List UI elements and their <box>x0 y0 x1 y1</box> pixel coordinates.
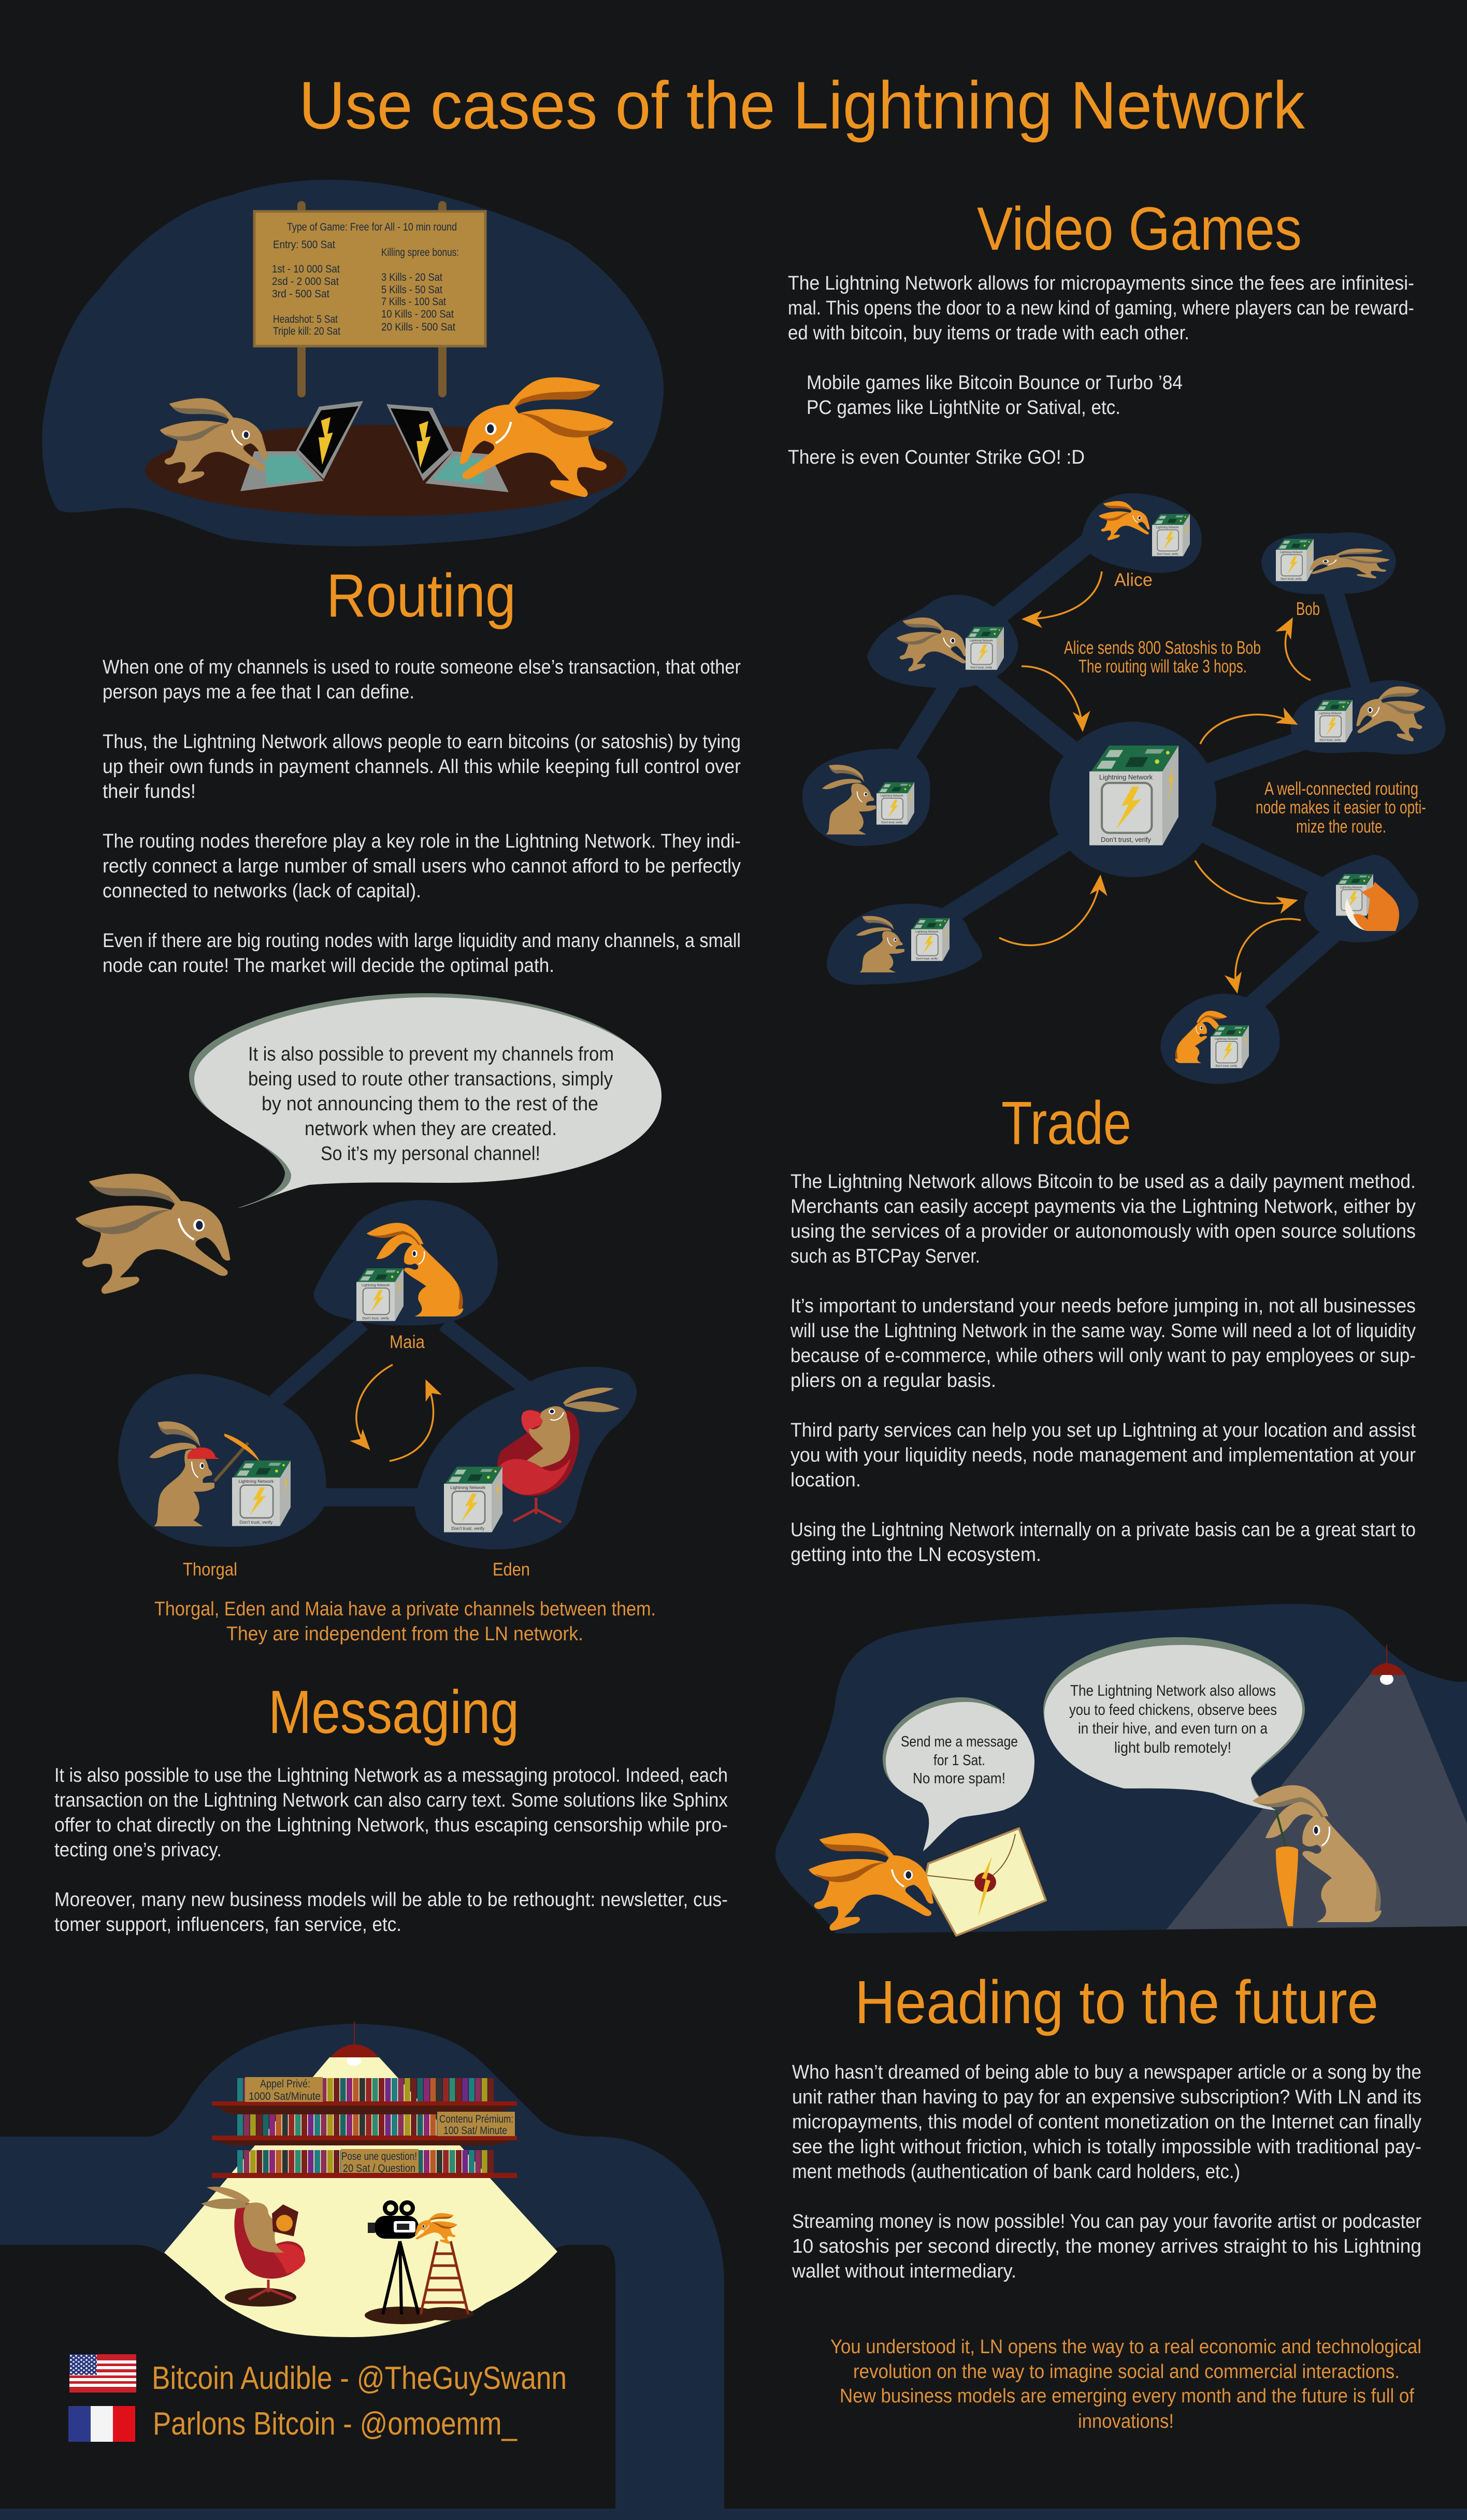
text: routing: Thus, the Lightning Network allows people to earn bitcoins (or satoshis) by tying <box>103 731 741 753</box>
text: trade: will use the Lightning Network in the same way. Some will need a lot of liquidity <box>790 1320 1416 1342</box>
icon: fox <box>1345 882 1399 931</box>
icon: lamp <box>1370 1645 1405 1685</box>
callout: routing node <box>1256 779 1426 837</box>
sign board with prices: Triple kill: 20 Sat <box>273 325 340 337</box>
icon: tan rabbit with carrot <box>1253 1785 1382 1922</box>
panel: streaming money illustration <box>164 2022 557 2337</box>
callout: conclusion: New business models are emerging every month and the future is full of <box>840 2385 1414 2407</box>
icon: ladder <box>420 2241 473 2321</box>
price label: private call: Appel Privé: <box>260 2078 310 2090</box>
node: Alice: Lightning Network <box>1156 526 1179 529</box>
text: future: ment methods (authentication of bank card holders, etc.) <box>792 2161 1240 2183</box>
icon: lamp <box>330 2022 378 2066</box>
callout: route description: The routing will take 3 hops. <box>1078 656 1247 677</box>
icon: red chair with rabbit <box>497 1387 620 1522</box>
node: left <box>802 749 930 846</box>
heading: routing: Routing <box>326 562 516 630</box>
laptop right <box>386 404 509 492</box>
icon: orange rabbit <box>459 377 613 497</box>
callout: conclusion: revolution on the way to imagine social and commercial interactions. <box>853 2361 1400 2383</box>
speech bubble: send a message: No more spam! <box>913 1770 1005 1787</box>
node: Maia: Don’t trust, verify <box>363 1316 389 1320</box>
light cone <box>1167 1675 1467 1929</box>
text: trade: using the services of a provider or autonomously with open source solutions <box>790 1221 1416 1242</box>
text: future <box>792 2061 1421 2282</box>
arrows: circular payment <box>356 1365 434 1461</box>
text: routing: connected to networks (lack of capital). <box>103 880 421 902</box>
text: trade: It’s important to understand your needs before jumping in, not all businesses <box>790 1295 1416 1317</box>
speech bubble: So it’s my personal channel! <box>321 1143 540 1165</box>
label: Maia: Maia <box>390 1332 425 1352</box>
sign board with prices: 7 Kills - 100 Sat <box>381 296 446 308</box>
text: future: wallet without intermediary. <box>792 2260 1016 2282</box>
blob background <box>775 1604 1467 1934</box>
callout: conclusion <box>830 2336 1421 2432</box>
node: right: Lightning Network <box>1319 712 1342 715</box>
callout: route description <box>1064 638 1261 677</box>
text: messaging: It is also possible to use the Lightning Network as a messaging protocol. Indeed, each <box>54 1765 728 1786</box>
label: Eden: Eden <box>493 1559 530 1580</box>
text: trade: location. <box>790 1469 861 1491</box>
icon: orange rabbit at camera <box>415 2213 457 2244</box>
light cone <box>164 2057 557 2337</box>
channel links <box>275 1324 534 1497</box>
text: messaging: transaction on the Lightning Network can also carry text. Some solutions like Sphinx <box>54 1789 728 1811</box>
node: Bob: Lightning Network <box>1280 551 1303 554</box>
sign board with prices: 20 Kills - 500 Sat <box>381 321 455 333</box>
panel: private channels illustration <box>76 993 661 1645</box>
callout: conclusion: You understood it, LN opens the way to a real economic and technological <box>830 2336 1421 2358</box>
icon: French flag <box>68 2406 135 2442</box>
text: video games: PC games like LightNite or Satival, etc. <box>807 397 1120 419</box>
node: Alice: Don’t trust, verify <box>1157 553 1178 556</box>
label: Bob: Bob <box>1296 599 1320 619</box>
node: fox <box>1304 855 1418 942</box>
text: trade: getting into the LN ecosystem. <box>790 1544 1041 1566</box>
icon: tan rabbit <box>160 398 268 483</box>
price label: premium content: 100 Sat/ Minute <box>443 2125 507 2137</box>
channel links <box>886 539 1365 1036</box>
table <box>145 425 627 516</box>
text: future: Streaming money is now possible! You can pay your favorite artist or podcaster <box>792 2211 1421 2232</box>
text: routing: up their own funds in payment channels. All this while keeping full control over <box>103 756 741 778</box>
text: trade: you with your liquidity needs, node management and implementation at your <box>790 1444 1416 1466</box>
text: video games: ed with bitcoin, buy items or trade with each other. <box>788 322 1189 344</box>
price label: private call <box>245 2077 323 2102</box>
price label: premium content <box>437 2112 515 2137</box>
label: English podcast: Bitcoin Audible - @TheGuySwann <box>152 2360 567 2396</box>
node: Thorgal: Don’t trust, verify <box>240 1520 273 1525</box>
caption: private channels: Thorgal, Eden and Maia have a private channels between them. <box>154 1598 656 1620</box>
price label: ask a question <box>341 2149 419 2174</box>
icon: camera on tripod <box>365 2200 440 2324</box>
callout: route description: Alice sends 800 Satoshis to Bob <box>1064 638 1261 658</box>
callout: conclusion: innovations! <box>1078 2411 1174 2432</box>
caption: private channels <box>154 1598 656 1645</box>
node: left top: Don’t trust, verify <box>971 666 992 669</box>
node: right <box>1291 680 1445 754</box>
price label: ask a question: Pose une question! <box>341 2151 417 2163</box>
blob background <box>42 180 664 546</box>
node: Alice <box>1081 493 1202 573</box>
text: trade: pliers on a regular basis. <box>790 1370 996 1392</box>
text: video games: mal. This opens the door to a new kind of gaming, where players can be reward- <box>788 297 1414 319</box>
text: trade <box>790 1171 1416 1566</box>
text: video games: The Lightning Network allows for micropayments since the fees are infinitesi- <box>788 273 1414 294</box>
text: trade: Third party services can help you set up Lightning at your location and assist <box>790 1420 1416 1441</box>
heading: trade: Trade <box>1001 1089 1131 1157</box>
text: video games: Mobile games like Bitcoin Bounce or Turbo ’84 <box>807 372 1183 394</box>
node: Thorgal <box>118 1374 326 1547</box>
node: bottom left <box>827 904 982 985</box>
text: future: unit rather than having to pay for an expensive subscription? With LN and its <box>792 2086 1421 2108</box>
node: bottom left: Lightning Network <box>915 930 939 934</box>
speech bubble: lightning also allows: The Lightning Network also allows <box>1070 1682 1276 1699</box>
callout: routing node: mize the route. <box>1296 817 1386 837</box>
text: routing: Even if there are big routing nodes with large liquidity and many channels, a small <box>103 930 741 952</box>
caption: private channels: They are independent from the LN network. <box>226 1623 583 1645</box>
speech bubble: lightning also allows: in their hive, and even turn on a <box>1078 1720 1268 1737</box>
heading: heading to the future: Heading to the future <box>855 1968 1378 2037</box>
panel: streaming band background <box>0 2024 1467 2520</box>
node: central hub <box>1049 722 1216 877</box>
node: Bob <box>1261 532 1396 594</box>
speech bubble: send a message: Send me a message <box>901 1734 1018 1750</box>
sign board with prices: Killing spree bonus: <box>381 247 459 259</box>
text: trade: because of e-commerce, while others will only want to pay employees or sup- <box>790 1345 1416 1367</box>
node: Bob: Don’t trust, verify <box>1281 578 1302 581</box>
speech bubble: It is also possible to prevent my channels from <box>248 1043 614 1065</box>
text: video games: There is even Counter Strike GO! :D <box>788 447 1085 468</box>
text: routing: The routing nodes therefore play a key role in the Lightning Network. They indi- <box>103 831 741 852</box>
text: routing: person pays me a fee that I can define. <box>103 681 414 703</box>
label: Thorgal: Thorgal <box>183 1559 237 1580</box>
sign board with prices: Entry: 500 Sat <box>273 239 335 251</box>
text: trade: Merchants can easily accept payments via the Lightning Network, either by <box>790 1196 1416 1218</box>
text: routing: When one of my channels is used to route someone else’s transaction, that other <box>103 656 741 678</box>
text: future: Who hasn’t dreamed of being able to buy a newspaper article or a song by the <box>792 2061 1421 2083</box>
label: Alice: Alice <box>1114 570 1153 590</box>
icon: tan rabbit speaking <box>76 1173 231 1294</box>
sign board with prices: Type of Game: Free for All - 10 min round <box>287 221 457 233</box>
text: trade: Using the Lightning Network internally on a private basis can be a great start to <box>790 1519 1416 1541</box>
panel: video game illustration <box>42 180 664 546</box>
heading: messaging: Messaging <box>268 1678 519 1746</box>
icon: rabbit reading in chair <box>201 2187 305 2307</box>
node: central hub: Lightning Network <box>1099 773 1153 781</box>
sign board with prices: 3rd - 500 Sat <box>272 288 329 300</box>
node: bottom: Don’t trust, verify <box>1216 1065 1237 1068</box>
speech bubble: network when they are created. <box>305 1118 557 1140</box>
text: routing: node can route! The market will decide the optimal path. <box>103 955 554 977</box>
speech bubble <box>189 993 661 1208</box>
books <box>237 2078 494 2173</box>
icon: carrot <box>1276 1810 1298 1926</box>
heading: video games: Video Games <box>977 195 1302 263</box>
text: messaging: tecting one’s privacy. <box>54 1839 222 1861</box>
speech bubble: send a message <box>883 1697 1034 1851</box>
sign board with prices: 5 Kills - 50 Sat <box>381 284 442 296</box>
icon: helmet <box>188 1448 220 1459</box>
node: left top <box>867 595 1018 688</box>
text: routing: their funds! <box>103 781 196 803</box>
sign board with prices: 2sd - 2 000 Sat <box>272 276 339 288</box>
speech bubble: being used to route other transactions, simply <box>248 1068 613 1090</box>
node: Eden: Don’t trust, verify <box>452 1526 485 1531</box>
title: Use cases of the Lightning Network <box>299 67 1305 143</box>
icon: envelope <box>925 1828 1046 1936</box>
text: trade: such as BTCPay Server. <box>790 1245 980 1267</box>
node: Eden: Lightning Network <box>450 1485 486 1490</box>
arrows: payment route <box>999 571 1311 992</box>
text: future: 10 satoshis per second directly, the money arrives straight to his Lightning <box>792 2236 1421 2257</box>
sign board with prices: 3 Kills - 20 Sat <box>381 271 442 283</box>
icon: pickaxe <box>214 1434 260 1481</box>
speech bubble: lightning also allows <box>1043 1637 1305 1810</box>
node: Thorgal: Lightning Network <box>238 1479 274 1484</box>
chart: lightning routing network diagram <box>802 493 1445 1084</box>
label: French podcast: Parlons Bitcoin - @omoemm_ <box>153 2406 517 2442</box>
node: bottom <box>1160 994 1279 1084</box>
text: messaging: offer to chat directly on the Lightning Network, thus escaping censorship while pro- <box>54 1814 728 1836</box>
text: messaging <box>54 1765 728 1936</box>
text: future: see the light without friction, which is totally impossible with traditional pay- <box>792 2136 1421 2158</box>
text: messaging: tomer support, influencers, fan service, etc. <box>54 1914 401 1936</box>
text: messaging: Moreover, many new business models will be able to be rethought: newsletter, cus- <box>54 1889 728 1911</box>
text: trade: The Lightning Network allows Bitcoin to be used as a daily payment method. <box>790 1171 1416 1193</box>
sign board with prices: Headshot: 5 Sat <box>273 313 338 325</box>
node: Maia <box>314 1200 498 1325</box>
icon: US flag <box>69 2354 136 2393</box>
panel: messaging and IoT illustration <box>775 1604 1467 1936</box>
text: routing <box>103 656 741 977</box>
node: left top: Lightning Network <box>970 639 993 642</box>
icon: orange rabbit with envelope <box>809 1833 933 1931</box>
text: routing: rectly connect a large number of small users who cannot afford to be perfectly <box>103 855 741 877</box>
speech bubble: lightning also allows: you to feed chickens, observe bees <box>1069 1701 1277 1719</box>
node: right: Don’t trust, verify <box>1319 739 1341 742</box>
node: fox: Lightning Network <box>1340 886 1362 889</box>
text: future: micropayments, this model of content monetization on the Internet can finally <box>792 2111 1421 2133</box>
node: bottom: Lightning Network <box>1215 1038 1238 1041</box>
node: central hub: Don’t trust, verify <box>1101 836 1151 843</box>
text: video games <box>788 273 1414 468</box>
node: left: Lightning Network <box>881 795 903 798</box>
speech bubble: send a message: for 1 Sat. <box>933 1752 985 1769</box>
node: Maia: Lightning Network <box>362 1284 390 1287</box>
price label: ask a question: 20 Sat / Question <box>343 2163 415 2174</box>
node: bottom left: Don’t trust, verify <box>916 957 938 961</box>
speech bubble: lightning also allows: light bulb remotely! <box>1114 1739 1231 1756</box>
sign board with prices: 1st - 10 000 Sat <box>272 263 340 275</box>
sign posts <box>297 201 447 397</box>
node: Eden <box>415 1367 637 1550</box>
laptop left <box>240 401 363 491</box>
callout: routing node: A well-connected routing <box>1264 779 1418 799</box>
price label: premium content: Contenu Prémium: <box>439 2113 513 2125</box>
shelves <box>212 2101 517 2178</box>
sign board with prices <box>254 211 485 346</box>
speech bubble: by not announcing them to the rest of the <box>262 1093 598 1115</box>
node: left: Don’t trust, verify <box>881 821 903 824</box>
sign board with prices: 10 Kills - 200 Sat <box>381 308 454 320</box>
price label: private call: 1000 Sat/Minute <box>249 2091 321 2102</box>
